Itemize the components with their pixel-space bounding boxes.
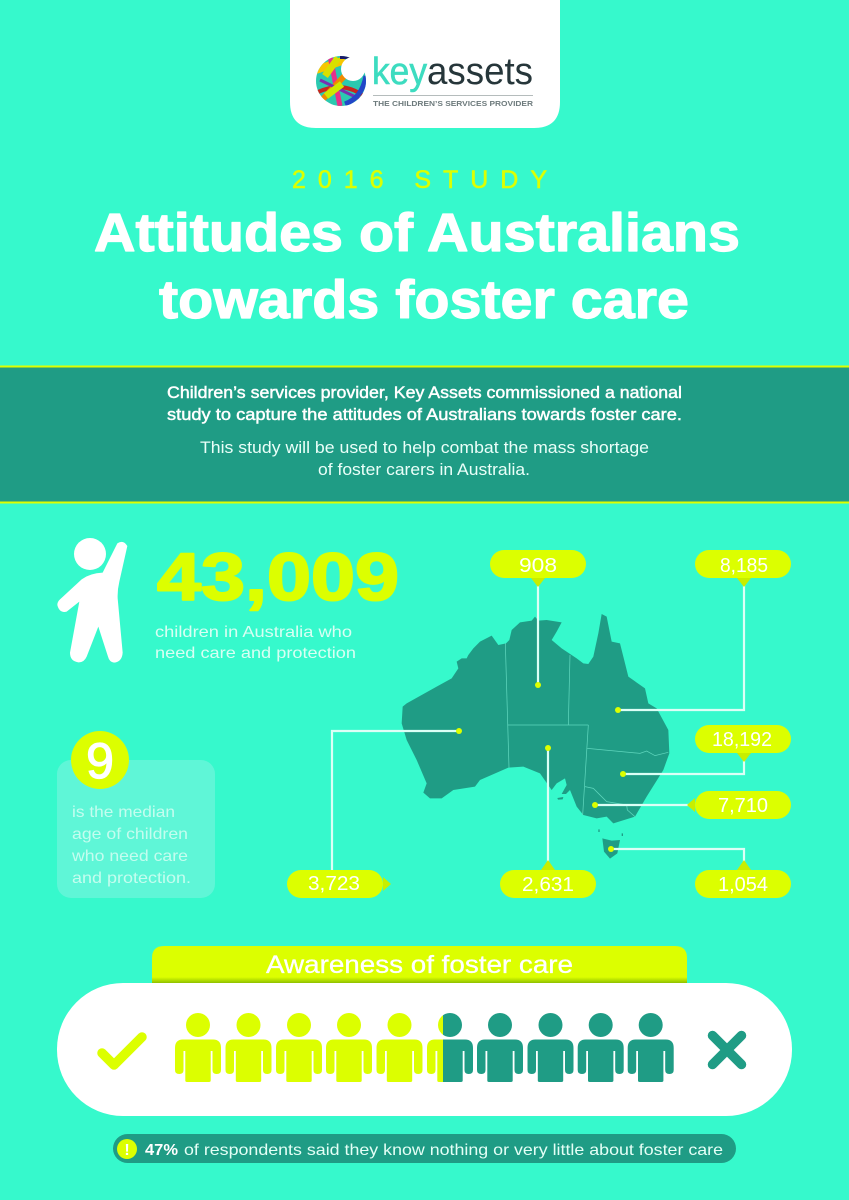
callout: Tasmania 1,054 — [608, 846, 791, 898]
intro text bold: study to capture the attitudes of Australians towards foster care. — [167, 406, 682, 424]
badge: 9: 9 — [86, 733, 114, 789]
people: aware (yellow) — [175, 1013, 443, 1082]
intro text regular: This study will be used to help combat the mass shortage — [200, 439, 649, 457]
icon: cross — [712, 1036, 742, 1064]
callout: Northern Territory 908: 908 — [519, 555, 557, 577]
median age text — [71, 804, 191, 887]
panel: awareness pictogram — [57, 983, 792, 1116]
median age text: age of children — [72, 826, 188, 843]
callout: South Australia 2,631 — [500, 745, 596, 898]
callout: 47% respondents — [113, 1134, 736, 1163]
callout: 47% respondents: 47% — [145, 1142, 178, 1159]
icon: check mark — [102, 1037, 142, 1065]
title — [94, 203, 740, 330]
map: Australia — [402, 614, 669, 859]
callout: Northern Territory 908 — [490, 550, 586, 688]
callout: Queensland 8,185: 8,185 — [720, 555, 768, 577]
statistic caption: need care and protection — [155, 645, 356, 662]
callout: Tasmania 1,054: 1,054 — [718, 874, 768, 896]
callout: Victoria 7,710 — [592, 791, 791, 819]
callout: Victoria 7,710: 7,710 — [718, 795, 768, 817]
callout: Queensland 8,185 — [615, 550, 791, 713]
logo wordmark: key — [372, 51, 427, 93]
Kangaroo Island and Bass Strait islands — [557, 797, 623, 836]
logo panel: assets — [427, 51, 533, 93]
title: Attitudes of Australians — [94, 203, 740, 263]
callout: New South Wales 18,192: 18,192 — [712, 729, 772, 751]
people: unaware (dark) — [427, 1013, 674, 1082]
callout: 47% respondents: of respondents said they know nothing or very little about foster care — [184, 1142, 723, 1159]
intro text bold — [167, 384, 682, 424]
callout: Western Australia 3,723: 3,723 — [308, 873, 360, 895]
icon: child with raised arm — [57, 538, 127, 663]
statistic caption — [155, 624, 356, 662]
intro band — [0, 366, 849, 504]
awareness heading tab: Awareness of foster care — [266, 951, 573, 979]
median age text: is the median — [72, 804, 175, 821]
statistic: 43,009: 43,009 — [157, 540, 399, 615]
intro text regular: of foster carers in Australia. — [318, 461, 530, 479]
badge: 9 — [71, 731, 129, 789]
callout: New South Wales 18,192 — [620, 725, 791, 777]
logo tagline: THE CHILDREN’S SERVICES PROVIDER — [373, 99, 534, 108]
median age text: and protection. — [72, 870, 191, 887]
intro text bold: Children’s services provider, Key Assets commissioned a national — [167, 384, 682, 402]
icon: key assets logo ring — [316, 56, 366, 106]
callout: Western Australia 3,723 — [287, 728, 462, 898]
statistic caption: children in Australia who — [155, 624, 352, 641]
icon: exclamation — [117, 1139, 137, 1159]
logo panel — [290, 0, 560, 128]
panel: median age — [57, 731, 215, 898]
callout: South Australia 2,631: 2,631 — [522, 874, 574, 896]
median age text: who need care — [71, 848, 188, 865]
intro text regular — [200, 439, 649, 479]
title: towards foster care — [159, 270, 689, 330]
eyebrow: 2016 study: 2016 STUDY — [292, 166, 547, 194]
icon: exclamation: ! — [124, 1142, 130, 1159]
awareness heading tab — [152, 946, 687, 983]
